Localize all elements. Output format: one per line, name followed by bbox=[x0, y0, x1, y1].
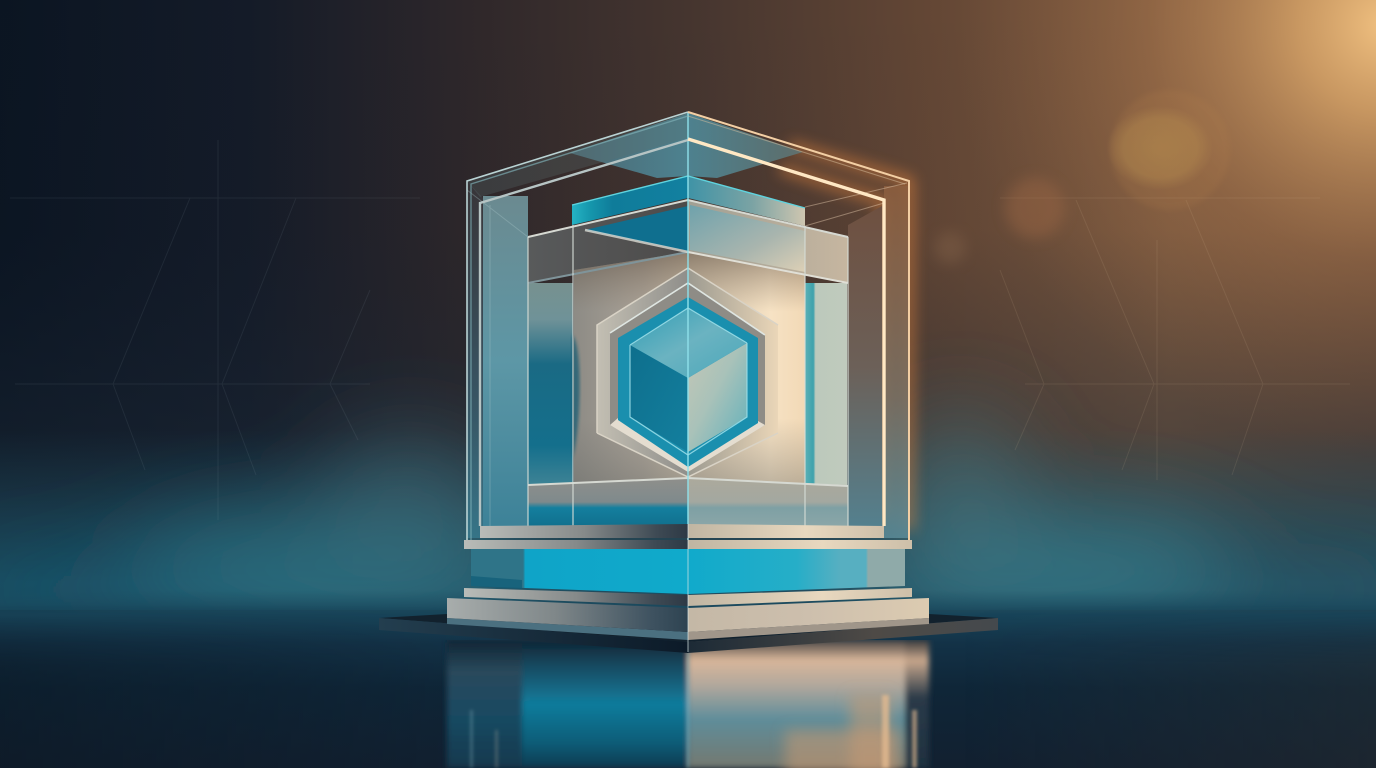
cube left face bbox=[630, 345, 688, 452]
orange edge glow bbox=[780, 145, 909, 530]
lower glass band right bbox=[688, 478, 848, 526]
plinth left bbox=[447, 598, 688, 632]
warm reflection glow bbox=[785, 695, 900, 768]
hexagon outer frame right bbox=[688, 268, 778, 477]
shadow on back wall bbox=[572, 335, 580, 458]
lower glass band left bbox=[528, 478, 688, 526]
center vertical edge bbox=[687, 112, 689, 540]
plinth trim left bbox=[447, 618, 688, 640]
cube right face bbox=[688, 343, 747, 452]
teal fog right bbox=[880, 410, 1376, 628]
plinth trim right bbox=[688, 618, 929, 640]
hexagon emblem bbox=[597, 268, 778, 477]
lens flare bokeh large bbox=[1107, 106, 1213, 190]
upper glass band right bbox=[688, 200, 848, 283]
hexagon teal field bbox=[618, 297, 758, 467]
glass frame lines bbox=[467, 176, 907, 526]
teal fog left bbox=[0, 430, 520, 632]
dark base slab top bbox=[379, 614, 998, 642]
reflection streaks bbox=[470, 640, 917, 768]
teal block underside left bbox=[585, 206, 688, 251]
inner glass column left bbox=[528, 283, 573, 486]
second frame right edge bbox=[688, 139, 884, 526]
faint hexagon grid left bbox=[10, 140, 420, 520]
glass cube bbox=[467, 112, 909, 540]
ceiling glass bbox=[467, 113, 803, 197]
hexagon upper bevel highlight bbox=[610, 283, 765, 335]
faint hexagon grid right bbox=[1000, 198, 1350, 480]
hexagon bevel bbox=[610, 283, 765, 470]
pedestal center edge bbox=[687, 524, 689, 652]
back wall bbox=[574, 252, 805, 490]
lens flare bokeh small bbox=[1005, 178, 1065, 238]
dark base slab right bbox=[688, 618, 998, 653]
frame floor band right bbox=[688, 524, 884, 538]
cyan glass band right bbox=[688, 549, 905, 594]
teal haze band bbox=[0, 430, 1376, 610]
pedestal reflection bbox=[447, 640, 929, 768]
teal block left face bbox=[572, 176, 688, 225]
inner glass column right bbox=[805, 283, 847, 486]
dark base slab left bbox=[379, 618, 688, 653]
top slab left bbox=[464, 540, 688, 549]
cube side tint left bbox=[467, 181, 483, 538]
reflective floor bbox=[0, 590, 1376, 768]
hexagon outer frame left bbox=[597, 268, 688, 477]
cyan glass band left bbox=[471, 549, 688, 594]
outer frame right edges bbox=[688, 112, 909, 540]
tall glass panel left bbox=[483, 196, 528, 526]
upper glass band left bbox=[528, 200, 688, 283]
teal block underside right bbox=[690, 205, 805, 272]
cube inner side right bbox=[848, 206, 882, 526]
cyan band lower reflection bbox=[471, 576, 522, 589]
lens flare ring bbox=[1110, 90, 1230, 210]
strip right bbox=[688, 588, 912, 606]
lens flare bokeh faint bbox=[934, 232, 966, 264]
cube side tint right bbox=[884, 186, 909, 538]
outer frame left edges bbox=[467, 112, 688, 540]
teal block right face bbox=[688, 176, 805, 226]
hexagon bevel highlight bbox=[597, 268, 778, 477]
pedestal bbox=[379, 524, 998, 653]
top slab right bbox=[688, 540, 912, 549]
plinth right bbox=[688, 598, 929, 632]
hexagon lower bevel bbox=[610, 418, 765, 472]
cube edges bbox=[630, 308, 747, 455]
strip left bbox=[464, 588, 688, 606]
cube top face bbox=[630, 308, 747, 378]
frame floor band left bbox=[480, 524, 688, 538]
